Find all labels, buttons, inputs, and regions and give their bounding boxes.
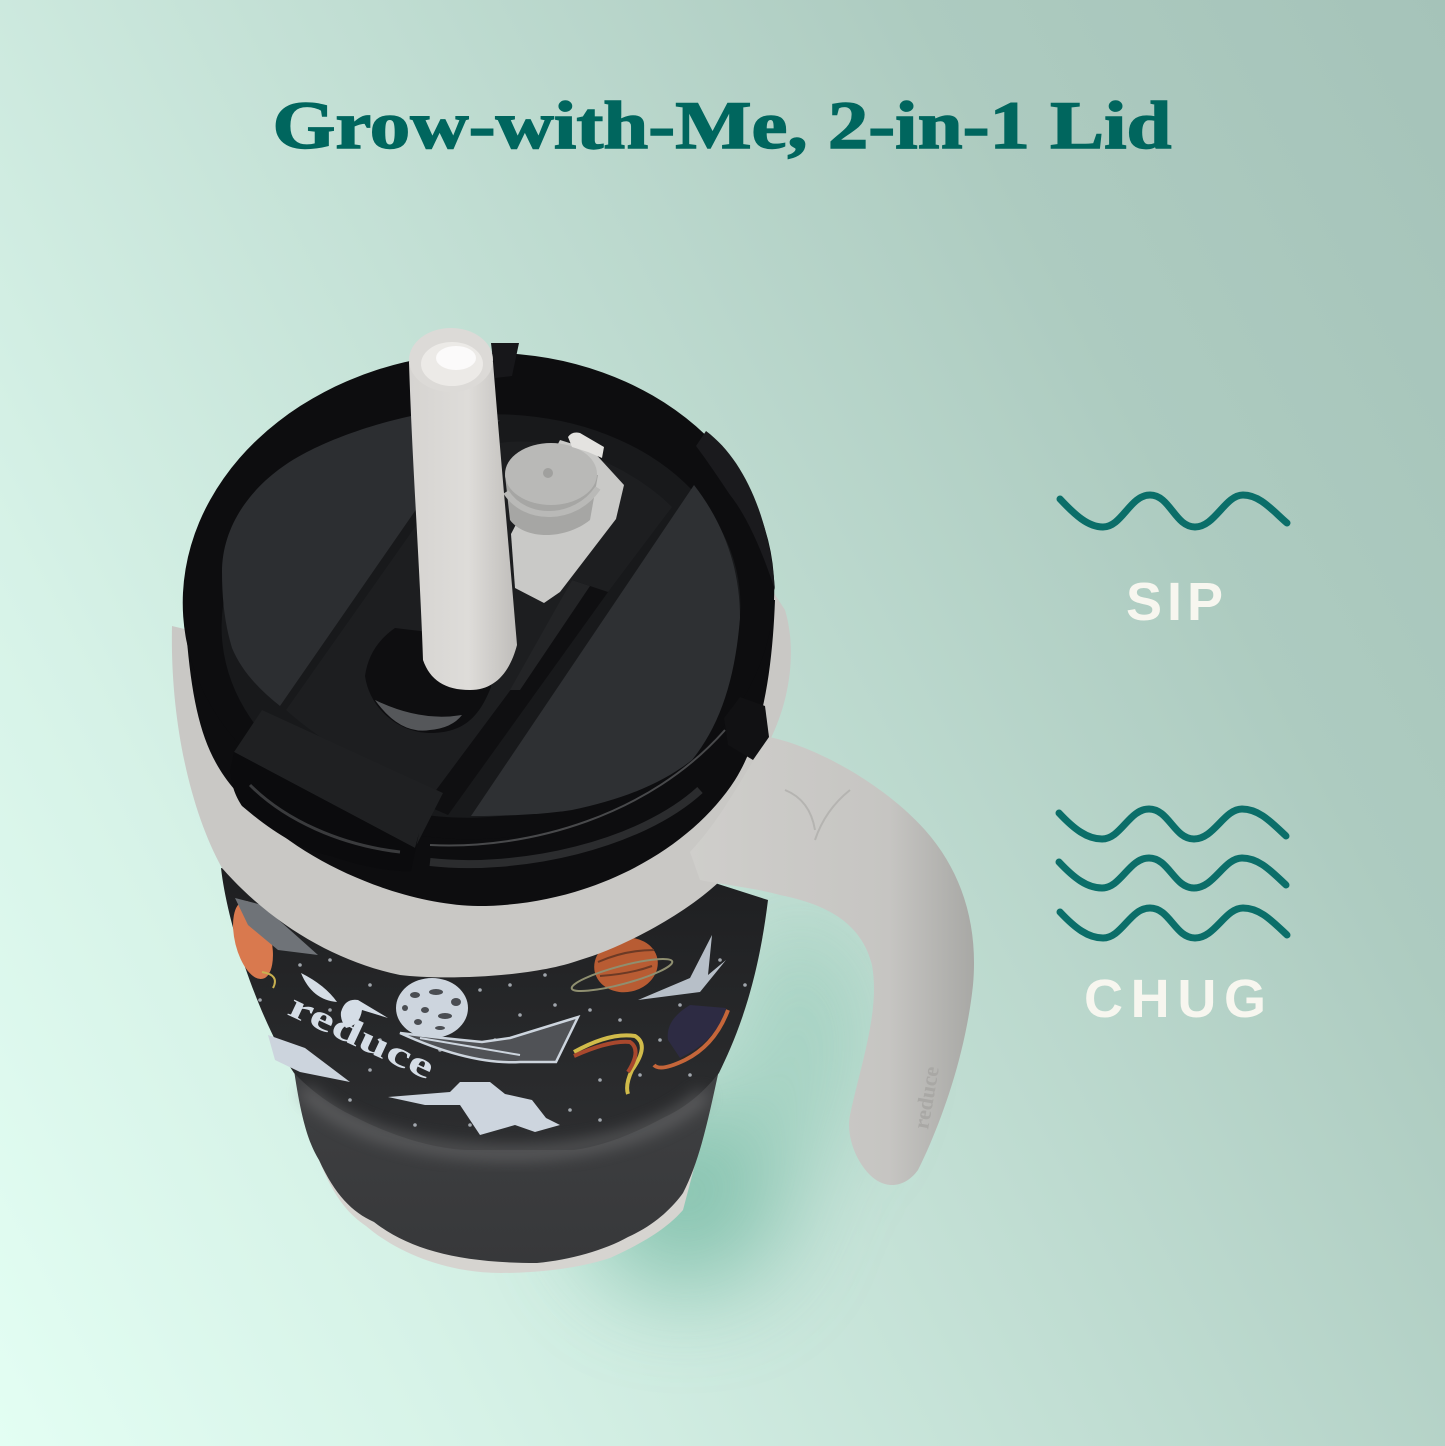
sip stopper arm bbox=[511, 440, 624, 603]
sip wave icon bbox=[1060, 495, 1287, 527]
slider clip bbox=[425, 580, 608, 815]
stopper cap bbox=[505, 432, 604, 535]
space shuttle upper right bbox=[638, 935, 726, 1000]
tumbler base bbox=[294, 1070, 719, 1263]
lid top rim bbox=[166, 333, 791, 859]
handle emboss text: reduce bbox=[908, 1064, 944, 1131]
moon bbox=[396, 978, 468, 1038]
collar grey band bbox=[172, 590, 791, 977]
space shuttle lower left bbox=[268, 1035, 350, 1082]
handle emboss logo bbox=[785, 790, 850, 840]
reduce logo on band bbox=[283, 973, 441, 1087]
lid left panel bbox=[222, 416, 500, 706]
sip label: SIP bbox=[1126, 572, 1228, 632]
straw hole recess bbox=[365, 628, 495, 733]
space shuttle upper left bbox=[235, 898, 318, 955]
orange arc bbox=[654, 1010, 728, 1068]
lid front latch bbox=[230, 710, 443, 871]
clip highlight bbox=[510, 580, 590, 690]
title: Grow-with-Me, 2-in-1 Lid bbox=[272, 87, 1172, 163]
dark planet bbox=[668, 1005, 726, 1058]
lid well bbox=[201, 389, 761, 843]
space shuttle center bbox=[400, 1017, 578, 1062]
light band transition bbox=[304, 1090, 705, 1153]
lid side gloss bbox=[430, 790, 700, 864]
lid right tab bbox=[696, 431, 775, 590]
chug wave icon bbox=[1059, 809, 1287, 938]
chug label: CHUG bbox=[1084, 969, 1266, 1029]
handle bbox=[690, 737, 974, 1185]
star dots bbox=[258, 958, 747, 1127]
mug shadow bbox=[585, 920, 860, 1290]
lid right latch bbox=[724, 697, 769, 760]
base bottom rim bbox=[299, 1090, 712, 1273]
rainbow trail bbox=[574, 1035, 642, 1094]
planet orange left bbox=[226, 897, 280, 988]
tumbler product photo bbox=[166, 328, 974, 1273]
centre slider bbox=[286, 441, 672, 792]
lid right panel bbox=[471, 485, 740, 816]
lid top notch bbox=[491, 343, 519, 378]
printed space band bbox=[221, 868, 768, 1150]
hole reflection bbox=[375, 700, 462, 731]
lid side wall bbox=[184, 600, 775, 906]
straw bbox=[409, 328, 517, 690]
reduce logo on band: reduce bbox=[283, 985, 441, 1087]
astronaut bbox=[388, 1082, 560, 1135]
lid rim highlight bbox=[430, 730, 725, 845]
planet orange ringed bbox=[569, 932, 675, 998]
